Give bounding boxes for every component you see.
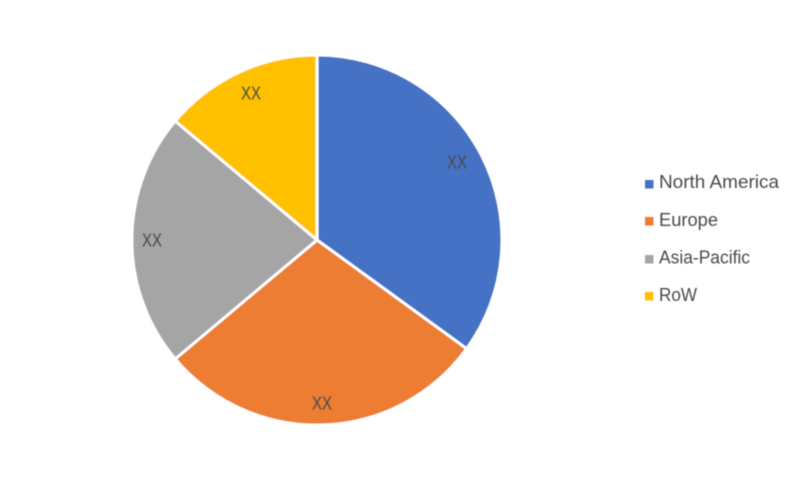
legend item: Europe: Europe: [659, 210, 718, 230]
slice: Europe: [175, 240, 467, 425]
pie chart: [132, 55, 502, 425]
data labels: [142, 84, 467, 414]
legend item: North America: North America: [659, 172, 780, 192]
legend item: Asia-Pacific: Asia-Pacific: [659, 248, 750, 268]
slice: Asia-Pacific: [132, 121, 317, 359]
label: RoW value: XX: [241, 84, 261, 104]
label: Europe value: XX: [312, 394, 332, 414]
label: Asia-Pacific value: XX: [142, 230, 162, 250]
slice: North America: [317, 55, 502, 349]
legend item: RoW: RoW: [659, 285, 697, 305]
legend: [645, 172, 780, 305]
slice: RoW: [175, 55, 317, 240]
label: North America value: XX: [447, 152, 467, 172]
